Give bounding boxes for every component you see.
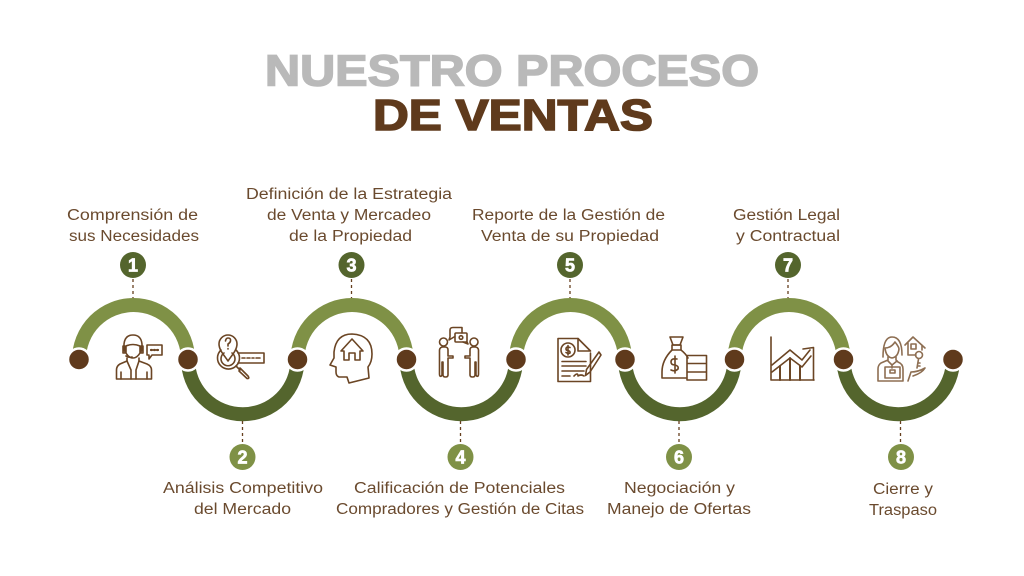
step 2: 2 [237, 448, 248, 468]
icon: agent with headset [116, 335, 162, 379]
step 8: Cierre y [873, 481, 933, 498]
step 2 [163, 444, 323, 518]
icon: location search [218, 335, 264, 379]
step 7: y Contractual [736, 228, 840, 245]
step 4: 4 [455, 448, 466, 468]
step 3: 3 [346, 256, 357, 276]
step 5: Venta de su Propiedad [481, 228, 659, 245]
title: NUESTRO PROCESO [265, 46, 759, 96]
step 8: Traspaso [869, 502, 937, 519]
step 4: Compradores y Gestión de Citas [336, 501, 584, 518]
title: DE VENTAS [373, 91, 653, 140]
title [265, 46, 759, 140]
step 2: Análisis Competitivo [163, 480, 323, 497]
step 6 [607, 444, 751, 518]
step 1: Comprensión de [67, 207, 198, 224]
icon: agent with house key [878, 337, 925, 381]
wave timeline [68, 305, 964, 414]
step 1: sus Necesidades [69, 228, 199, 245]
step 7 [733, 207, 840, 278]
step 7: 7 [783, 256, 793, 276]
icon: head with house [330, 334, 372, 383]
step 6: Negociación y [624, 480, 735, 497]
step 6: 6 [674, 448, 684, 468]
step 1 [67, 207, 199, 278]
icon: two people talking [440, 328, 478, 377]
step 1: 1 [128, 256, 138, 276]
step 5: 5 [565, 256, 575, 276]
step 8 [869, 444, 937, 519]
icon: signed contract [558, 338, 601, 382]
step 2: del Mercado [194, 501, 291, 518]
step 4 [336, 444, 584, 518]
icon: rising chart [771, 337, 814, 380]
connector lines [133, 279, 900, 443]
step 5: Reporte de la Gestión de [472, 207, 665, 224]
step 8: 8 [896, 448, 906, 468]
step 3 [246, 186, 452, 278]
step 3: Definición de la Estrategia [246, 186, 452, 203]
step 3: de Venta y Mercadeo [267, 207, 431, 224]
icon: money bag and coins [662, 337, 706, 380]
step 4: Calificación de Potenciales [354, 480, 565, 497]
step 5 [472, 207, 665, 278]
step 7: Gestión Legal [733, 207, 840, 224]
step 6: Manejo de Ofertas [607, 501, 751, 518]
step 3: de la Propiedad [289, 228, 412, 245]
